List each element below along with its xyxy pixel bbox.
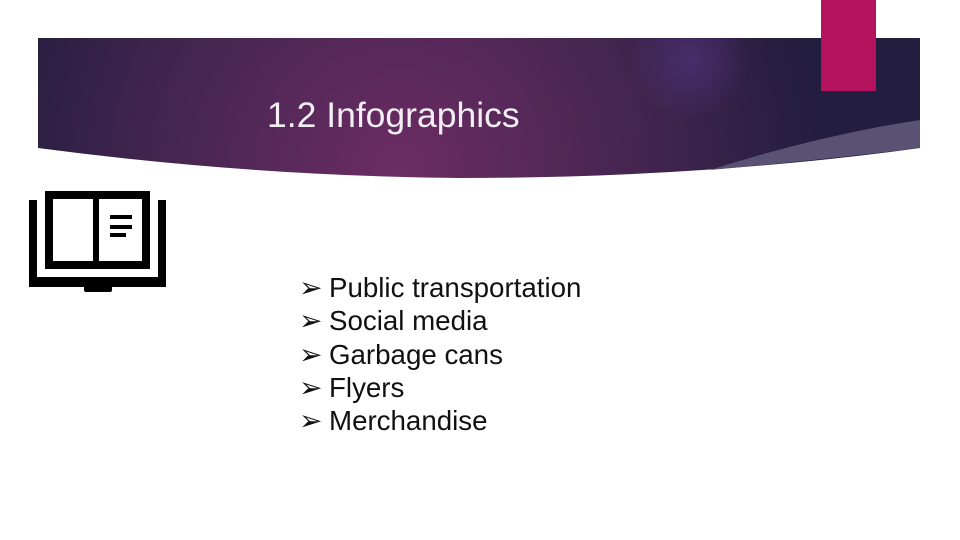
- bullet list: [299, 271, 581, 437]
- bullet list: ➢: [299, 271, 322, 304]
- bullet list: Flyers: [329, 372, 404, 403]
- bullet list: Garbage cans: [329, 339, 503, 370]
- bullet list: Merchandise: [329, 405, 488, 436]
- icon: open book: [29, 191, 166, 292]
- bullet list: ➢: [299, 304, 322, 337]
- bullet list: Social media: [329, 305, 488, 336]
- bullet list: Public transportation: [329, 272, 581, 303]
- bullet list: ➢: [299, 404, 322, 437]
- title: 1.2 Infographics: [267, 95, 520, 135]
- magenta tab: [821, 0, 876, 91]
- bullet list: ➢: [299, 338, 322, 371]
- banner accent wedge: [710, 120, 920, 170]
- bullet list: ➢: [299, 371, 322, 404]
